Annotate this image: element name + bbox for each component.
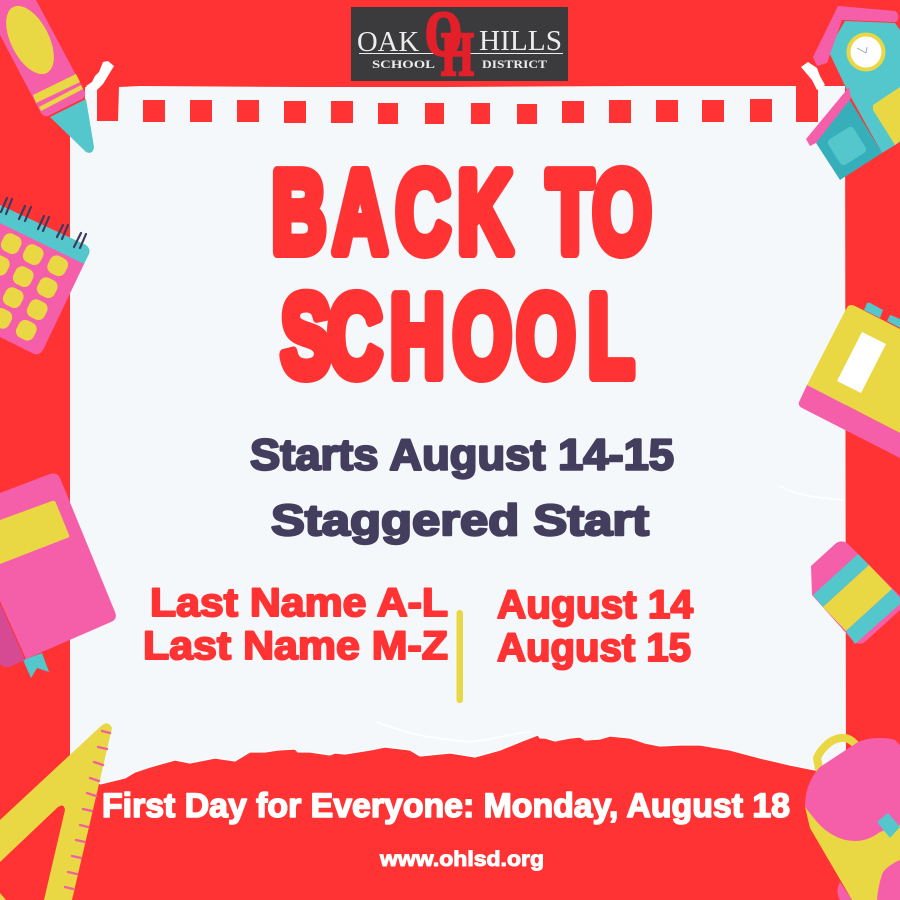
schedule: last name groups: Last Name A-L [150,581,448,625]
logo: Oak Hills School District: DISTRICT [482,59,547,71]
first day banner text: First Day for Everyone: Monday, August 18 [102,787,790,825]
torn notebook paper panel [70,61,846,790]
logo: Oak Hills School District: O [425,0,462,69]
logo: Oak Hills School District [351,0,568,89]
title: Back to School: SCHOOL [281,270,634,401]
schedule: last name groups [143,581,448,668]
schedule: last name groups: Last Name M-Z [143,624,448,668]
icon: yellow pencil case [799,303,900,458]
schedule: dates: August 15 [497,626,691,670]
schedule: dates: August 14 [497,583,694,627]
icon: pink book with bookmark [0,474,116,678]
icon: striped eraser [811,541,900,644]
icon: spiral calendar [0,198,90,354]
subheading: start dates: Staggered Start [271,496,649,545]
icon: backpack [805,738,900,900]
title: Back to School [272,146,651,401]
logo: Oak Hills School District: HILLS [479,25,562,57]
logo: Oak Hills School District: SCHOOL [372,59,435,71]
subheading: start dates [250,430,674,545]
website: www.ohlsd.org [379,848,544,871]
icon: birdhouse with clock [806,6,900,180]
schedule: dates [497,583,694,670]
icon: crayon [0,0,94,153]
title: Back to School: BACK TO [272,146,651,277]
logo: Oak Hills School District: OAK [357,26,419,58]
torn red footer band [60,735,900,900]
subheading: start dates: Starts August 14-15 [250,430,674,480]
icon: yellow ruler triangle [0,723,112,900]
schedule divider [456,610,463,703]
logo: Oak Hills School District: H [441,21,474,89]
